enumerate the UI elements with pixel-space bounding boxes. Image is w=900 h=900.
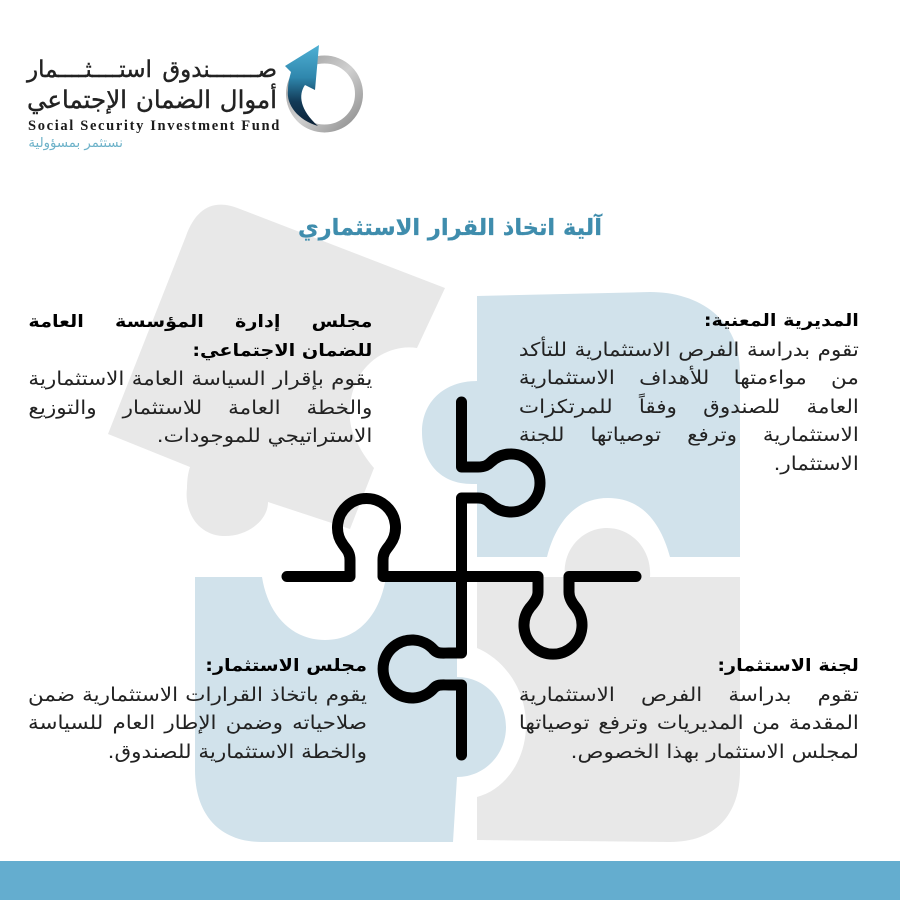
logo line 2: أموال الضمان الإجتماعي — [27, 85, 277, 114]
body text: يقوم باتخاذ القرارات الاستثمارية ضمن — [28, 684, 367, 706]
body text — [519, 684, 859, 763]
vertical outline with knobs — [383, 402, 540, 755]
body text: من مواءمتها للأهداف الاستثمارية — [519, 367, 859, 389]
text block: board of the social security corporation — [28, 312, 372, 447]
text block: concerned directorate — [519, 311, 859, 474]
puzzle piece: bottom-left blue — [195, 577, 506, 842]
heading: المديرية المعنية: — [704, 311, 859, 331]
heading: مجلس الاستثمار: — [205, 656, 367, 676]
body text: والخطة العامة للاستثمار والتوزيع — [28, 396, 372, 418]
body text — [28, 684, 367, 763]
logo line 1: صـــــــندوق استــــثــــمار — [27, 57, 277, 83]
heading: لجنة الاستثمار: — [717, 656, 859, 676]
body text: الاستثمارية وترفع توصياتها للجنة — [519, 424, 859, 446]
black puzzle outlines — [287, 402, 636, 755]
text block: investment council — [28, 656, 367, 763]
horizontal outline with knobs — [287, 499, 636, 654]
heading: للضمان الاجتماعي: — [192, 340, 372, 360]
body text: الاستثمار. — [774, 452, 859, 474]
logo tagline: نستثمر بمسؤولية — [28, 136, 123, 151]
puzzle piece: top-right inner grey knob and bottom-right grey — [477, 528, 740, 842]
body text: يقوم بإقرار السياسة العامة الاستثمارية — [28, 368, 372, 390]
body text: الاستراتيجي للموجودات. — [156, 425, 372, 447]
title: آلية اتخاذ القرار الاستثماري — [298, 215, 602, 241]
text block: investment committee — [519, 656, 859, 763]
body text — [28, 368, 372, 447]
body text: العامة للصندوق وفقاً للمرتكزات — [519, 396, 859, 418]
body text: صلاحياته وضمن الإطار العام للسياسة — [28, 712, 367, 734]
body text: لمجلس الاستثمار بهذا الخصوص. — [571, 740, 859, 762]
body text: تقوم بدراسة الفرص الاستثمارية للتأكد — [519, 338, 859, 360]
logo icon: ring and arrow — [285, 45, 363, 132]
body text: والخطة الاستثمارية للصندوق. — [108, 740, 367, 762]
puzzle piece: top-left grey — [108, 205, 445, 536]
logo — [26, 45, 363, 151]
body text: تقوم بدراسة الفرص الاستثمارية — [519, 684, 859, 706]
footer bar — [0, 861, 900, 900]
puzzle piece: top-right blue — [422, 292, 740, 557]
heading — [28, 312, 372, 360]
body text — [519, 336, 859, 474]
body text: المقدمة من المديريات وترفع توصياتها — [519, 712, 859, 734]
heading: مجلس إدارة المؤسسة العامة — [28, 312, 372, 332]
logo english name: Social Security Investment Fund — [28, 118, 281, 134]
